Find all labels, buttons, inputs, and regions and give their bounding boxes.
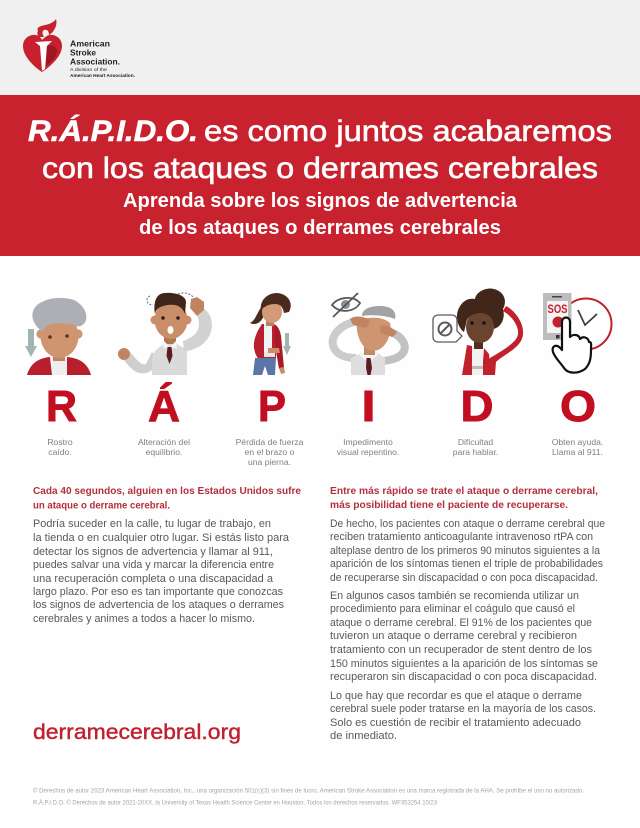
subtitle: [123, 190, 518, 239]
logo wordmark: American: [70, 38, 110, 48]
left column body text: largo plazo. Por eso es tan importante que conozcas: [33, 586, 283, 598]
right column body text: tuvieron un ataque o derrame cerebral y recibieron: [330, 630, 577, 642]
logo wordmark: Association.: [70, 56, 120, 66]
website link: derramecerebral.org: [33, 721, 241, 744]
right column body text: [330, 518, 605, 742]
main title: con los ataques o derrames cerebrales: [42, 152, 598, 185]
big letters R A P I D O: P: [258, 382, 286, 431]
main title: [28, 114, 612, 185]
right column heading: más posibilidad tiene el paciente de recuperarse.: [330, 500, 568, 511]
logo wordmark: [70, 38, 135, 78]
big letters R A P I D O: [46, 381, 596, 431]
right column body text: alteplase dentro de los primeros 90 minutos siguientes a la: [330, 545, 600, 557]
left column heading: un ataque o derrame cerebral.: [33, 500, 170, 512]
left column heading: Cada 40 segundos, alguien en los Estados Unidos sufre: [33, 486, 301, 497]
illustration: I, blurred vision: [332, 293, 405, 375]
right column body text: tratamiento con un recuperador de stent dentro de los: [330, 644, 592, 656]
left column body text: [33, 518, 289, 625]
right column body text: procedimiento para eliminar el coágulo que causó el: [330, 603, 575, 615]
captions under letters: para hablar.: [453, 447, 498, 457]
left column body text: puedes salvar una vida y marcar la diferencia entre: [33, 559, 274, 571]
big letters R A P I D O: R: [46, 382, 77, 431]
right column body text: reciben tratamiento anticoagulante intravenoso rtPA con: [330, 531, 593, 543]
captions under letters: una pierna.: [248, 457, 291, 467]
left column body text: Podría suceder en la calle, tu lugar de trabajo, en: [33, 518, 271, 530]
captions under letters: visual repentino.: [337, 447, 399, 457]
captions under letters: [47, 437, 603, 467]
left column heading: [33, 486, 301, 512]
subtitle: Aprenda sobre los signos de advertencia: [123, 190, 518, 212]
illustration: P, arm weakness: [250, 293, 291, 375]
right column body text: En algunos casos también se recomienda utilizar un: [330, 590, 579, 602]
illustration: R, drooping face: [25, 298, 91, 375]
captions under letters: caído.: [48, 447, 72, 457]
right column body text: ataque o derrame cerebral. El 91% de los pacientes que: [330, 617, 592, 629]
left column body text: la tienda o en cualquier otro lugar. Si estás listo para: [33, 532, 289, 544]
right column body text: aparición de los síntomas tienen el triple de probabilidades: [330, 558, 603, 570]
subtitle: de los ataques o derrames cerebrales: [139, 217, 501, 239]
illustration: O, phone and clock: [543, 293, 612, 373]
icon: speech bubble with prohibition sign: [433, 315, 462, 342]
big letters R A P I D O: O: [560, 382, 596, 431]
captions under letters: equilibrio.: [146, 447, 182, 457]
left column body text: una recuperación completa o una discapacidad a: [33, 573, 273, 585]
header background with logo: [0, 0, 640, 95]
main title: R.Á.P.I.D.O.: [28, 114, 198, 148]
captions under letters: en el brazo o: [245, 447, 295, 457]
right column body text: recuperaron sin discapacidad o con poca discapacidad.: [330, 671, 597, 683]
logo wordmark: A division of the: [70, 67, 107, 72]
right column body text: cerebral suele poder tratarse en la mayoría de los casos.: [330, 703, 596, 715]
big letters R A P I D O: I: [362, 382, 376, 431]
right column body text: de inmediato.: [330, 730, 397, 742]
icon: heart and torch logo: [23, 19, 62, 72]
captions under letters: Dificultad: [458, 437, 493, 447]
left column body text: cerebrales y animes a todos a hacer lo mismo.: [33, 613, 255, 625]
right column heading: Entre más rápido se trate el ataque o derrame cerebral,: [330, 486, 598, 497]
captions under letters: Pérdida de fuerza: [236, 437, 304, 447]
main title: es como juntos acabaremos: [204, 115, 612, 148]
left column body text: detectar los signos de advertencia y llamar al 911,: [33, 546, 273, 558]
illustration: A, dizzy man: [118, 293, 212, 375]
footer copyright: [33, 786, 584, 806]
captions under letters: Llama al 911.: [552, 447, 603, 457]
right column body text: de recuperarse sin discapacidad o con poca discapacidad.: [330, 572, 598, 584]
logo wordmark: American Heart Association.: [70, 73, 135, 78]
icon: crossed-out eye: [332, 293, 360, 317]
captions under letters: Rostro: [47, 437, 73, 447]
illustration: O, phone and clock: SOS: [548, 304, 568, 316]
right column body text: De hecho, los pacientes con ataque o derrame cerebral que: [330, 518, 605, 530]
right column heading: [330, 486, 598, 511]
right column body text: Solo es cuestión de recibir el tratamiento adecuado: [330, 717, 581, 729]
footer copyright: R.Á.P.I.D.O. © Derechos de autor 2021-20XX, la University of Texas Health Science Center en Houston. Todos los derechos reservados. WF353254 10/23: [33, 798, 437, 806]
logo wordmark: Stroke: [70, 48, 96, 58]
big letters R A P I D O: Á: [148, 381, 180, 431]
footer copyright: © Derechos de autor 2023 American Heart Association, Inc., una organización 501(c)(3) sin fines de lucro. American Stroke Association es una marca registrada de la AHA. Se prohíbe el uso no autorizado.: [33, 786, 584, 794]
right column body text: 150 minutos siguientes a la aparición de los síntomas se: [330, 658, 598, 670]
illustration: D, difficulty speaking: [433, 289, 523, 375]
captions under letters: Impedimento: [343, 437, 393, 447]
right column body text: Lo que hay que recordar es que el ataque o derrame: [330, 690, 582, 702]
captions under letters: Obten ayuda.: [552, 437, 603, 447]
title banner: [0, 95, 640, 256]
captions under letters: Alteración del: [138, 437, 190, 447]
big letters R A P I D O: D: [460, 382, 494, 431]
left column body text: los signos de advertencia de los ataques o derrames: [33, 599, 284, 611]
